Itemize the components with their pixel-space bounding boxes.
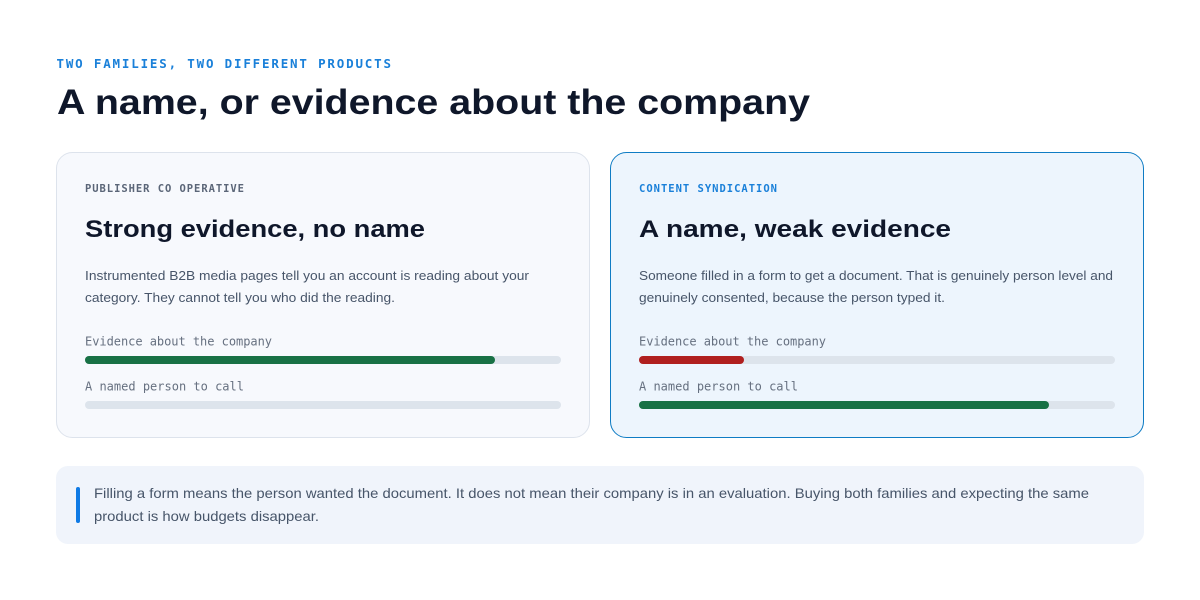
panel description [639, 268, 1113, 305]
bar: a named person to call, empty: A named person to call [85, 380, 244, 394]
bar: evidence about the company, strong: Evidence about the company [85, 335, 272, 349]
panel description: Someone filled in a form to get a document. That is genuinely person level and [639, 268, 1113, 283]
title: A name, or evidence about the company [57, 83, 811, 122]
bar: evidence about the company, weak [639, 335, 1115, 364]
callout text [94, 485, 1089, 524]
callout text: Filling a form means the person wanted the document. It does not mean their company is in an evaluation. Buying both families and expecting the same [94, 485, 1089, 501]
panel: content syndication [610, 152, 1144, 438]
panel description [85, 268, 530, 305]
callout background [56, 466, 1144, 544]
panel tag: CONTENT SYNDICATION [639, 183, 777, 195]
panel background [56, 152, 590, 438]
callout [56, 466, 1144, 544]
panel tag: PUBLISHER CO OPERATIVE [85, 183, 244, 195]
bar: evidence about the company, strong [85, 335, 561, 364]
panel description: genuinely consented, because the person typed it. [639, 290, 945, 305]
panel background [610, 152, 1144, 438]
panel: publisher co operative [56, 152, 590, 438]
bar: a named person to call, empty [85, 380, 561, 409]
panel description: category. They cannot tell you who did the reading. [85, 290, 395, 305]
panel description: Instrumented B2B media pages tell you an account is reading about your [85, 268, 530, 283]
callout text: product is how budgets disappear. [94, 508, 319, 524]
panel heading: A name, weak evidence [639, 216, 951, 243]
callout accent bar [76, 487, 80, 523]
eyebrow heading: TWO FAMILIES, TWO DIFFERENT PRODUCTS [56, 56, 391, 71]
bar: a named person to call, strong [639, 380, 1115, 409]
panel heading: Strong evidence, no name [85, 216, 425, 243]
bar: a named person to call, strong: A named person to call [639, 380, 798, 394]
bar: evidence about the company, weak: Evidence about the company [639, 335, 826, 349]
